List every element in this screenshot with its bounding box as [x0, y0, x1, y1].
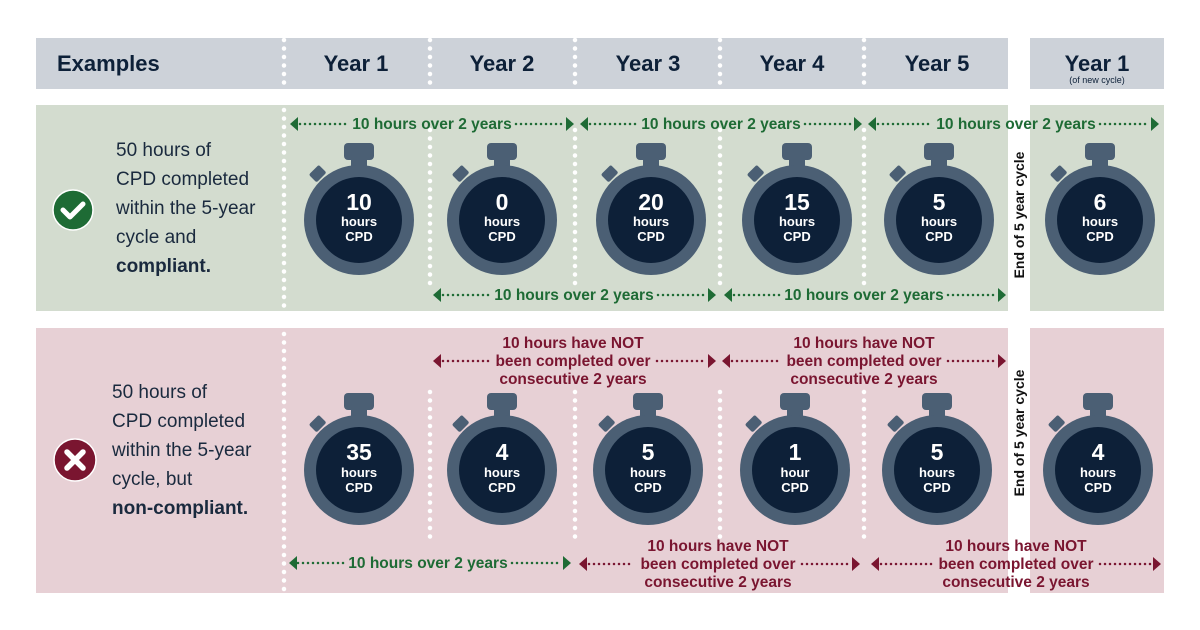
red arrows: consecutive 2 years [942, 574, 1090, 591]
text: compliant description [115, 140, 256, 277]
green arrows: 10 hours over 2 years [784, 287, 944, 304]
text: non-compliant description: cycle, but [112, 469, 193, 490]
stopwatches: compliant: 15 [784, 189, 810, 215]
red arrows: 10 hours have NOT [647, 538, 789, 555]
text: compliant description: 50 hours of [116, 140, 212, 161]
header bar: Year 5 [905, 51, 969, 76]
header bar: Year 4 [760, 51, 825, 76]
red arrows: been completed over [786, 353, 942, 370]
vertical label: end of cycle [1011, 151, 1027, 496]
stopwatches: non-compliant: 5 [931, 439, 944, 465]
text: compliant description: compliant. [116, 256, 211, 277]
text: compliant description: CPD completed [116, 169, 249, 190]
stopwatches: non-compliant: hours [919, 465, 955, 480]
green arrows: 10 hours over 2 years [352, 116, 512, 133]
stopwatches: compliant: CPD [1086, 229, 1114, 244]
red arrows: 10 hours have NOT [502, 335, 644, 352]
stopwatches: non-compliant: hour [781, 465, 809, 480]
header bar: Year 2 [470, 51, 534, 76]
red arrows: been completed over [938, 556, 1094, 573]
stopwatches: non-compliant: hours [484, 465, 520, 480]
header bar: Year 3 [616, 51, 680, 76]
red arrows: 10 hours have NOT [945, 538, 1087, 555]
red arrows: consecutive 2 years [790, 371, 938, 388]
icon: check [53, 190, 93, 230]
red arrows: consecutive 2 years [644, 574, 792, 591]
stopwatches: non-compliant: CPD [634, 480, 662, 495]
stopwatches: non-compliant: CPD [923, 480, 951, 495]
stopwatches: compliant: CPD [783, 229, 811, 244]
stopwatches: non-compliant: hours [630, 465, 666, 480]
green arrows: 10 hours over 2 years [494, 287, 654, 304]
stopwatches: non-compliant: 35 [346, 439, 372, 465]
stopwatches: compliant: hours [779, 214, 815, 229]
text: compliant description: cycle and [116, 227, 196, 248]
header bar: Year 1 [1065, 51, 1129, 76]
green arrows: 10 hours over 2 years [641, 116, 801, 133]
header bar: Examples [57, 51, 160, 76]
text: compliant description: within the 5-year [115, 198, 256, 219]
stopwatches: non-compliant: 5 [642, 439, 655, 465]
panel: compliant [36, 105, 1164, 311]
stopwatches: non-compliant: hours [341, 465, 377, 480]
red arrows: consecutive 2 years [499, 371, 647, 388]
stopwatches: non-compliant: CPD [781, 480, 809, 495]
stopwatches: non-compliant: 4 [496, 439, 509, 465]
stopwatches: compliant [304, 143, 1155, 275]
text: non-compliant description: non-compliant. [112, 498, 248, 519]
panel: non-compliant [36, 328, 1164, 593]
stopwatches: non-compliant: 4 [1092, 439, 1105, 465]
stopwatches: compliant: hours [633, 214, 669, 229]
red arrows [433, 335, 1161, 591]
text: non-compliant description: CPD completed [112, 411, 245, 432]
green arrows: 10 hours over 2 years [348, 555, 508, 572]
stopwatches: compliant: CPD [925, 229, 953, 244]
text: non-compliant description [111, 382, 252, 519]
stopwatches: compliant: 20 [638, 189, 664, 215]
vertical label: end of cycle: End of 5 year cycle [1011, 369, 1027, 496]
text: non-compliant description: 50 hours of [112, 382, 208, 403]
stopwatches: compliant: 6 [1094, 189, 1106, 215]
stopwatches: compliant: CPD [345, 229, 373, 244]
header bar: Year 1 [324, 51, 388, 76]
red arrows: been completed over [495, 353, 651, 370]
text: non-compliant description: within the 5-year [111, 440, 252, 461]
stopwatches: compliant: hours [921, 214, 957, 229]
stopwatches: non-compliant [304, 393, 1153, 525]
stopwatches: compliant: 0 [496, 189, 508, 215]
stopwatches: compliant: hours [484, 214, 520, 229]
stopwatches: compliant: CPD [488, 229, 516, 244]
stopwatches: non-compliant: CPD [345, 480, 373, 495]
stopwatches: compliant: 5 [933, 189, 946, 215]
vertical label: end of cycle: End of 5 year cycle [1011, 151, 1027, 278]
stopwatches: non-compliant: CPD [1084, 480, 1112, 495]
stopwatches: non-compliant: hours [1080, 465, 1116, 480]
header bar: (of new cycle) [1069, 75, 1125, 85]
stopwatches: compliant: hours [1082, 214, 1118, 229]
header bar [36, 38, 1164, 89]
icon: cross [54, 439, 96, 481]
stopwatches: non-compliant: CPD [488, 480, 516, 495]
red arrows: 10 hours have NOT [793, 335, 935, 352]
red arrows: been completed over [640, 556, 796, 573]
stopwatches: compliant: CPD [637, 229, 665, 244]
stopwatches: compliant: 10 [346, 189, 372, 215]
stopwatches: compliant: hours [341, 214, 377, 229]
stopwatches: non-compliant: 1 [789, 439, 802, 465]
green arrows: 10 hours over 2 years [936, 116, 1096, 133]
green arrows [289, 116, 1159, 572]
